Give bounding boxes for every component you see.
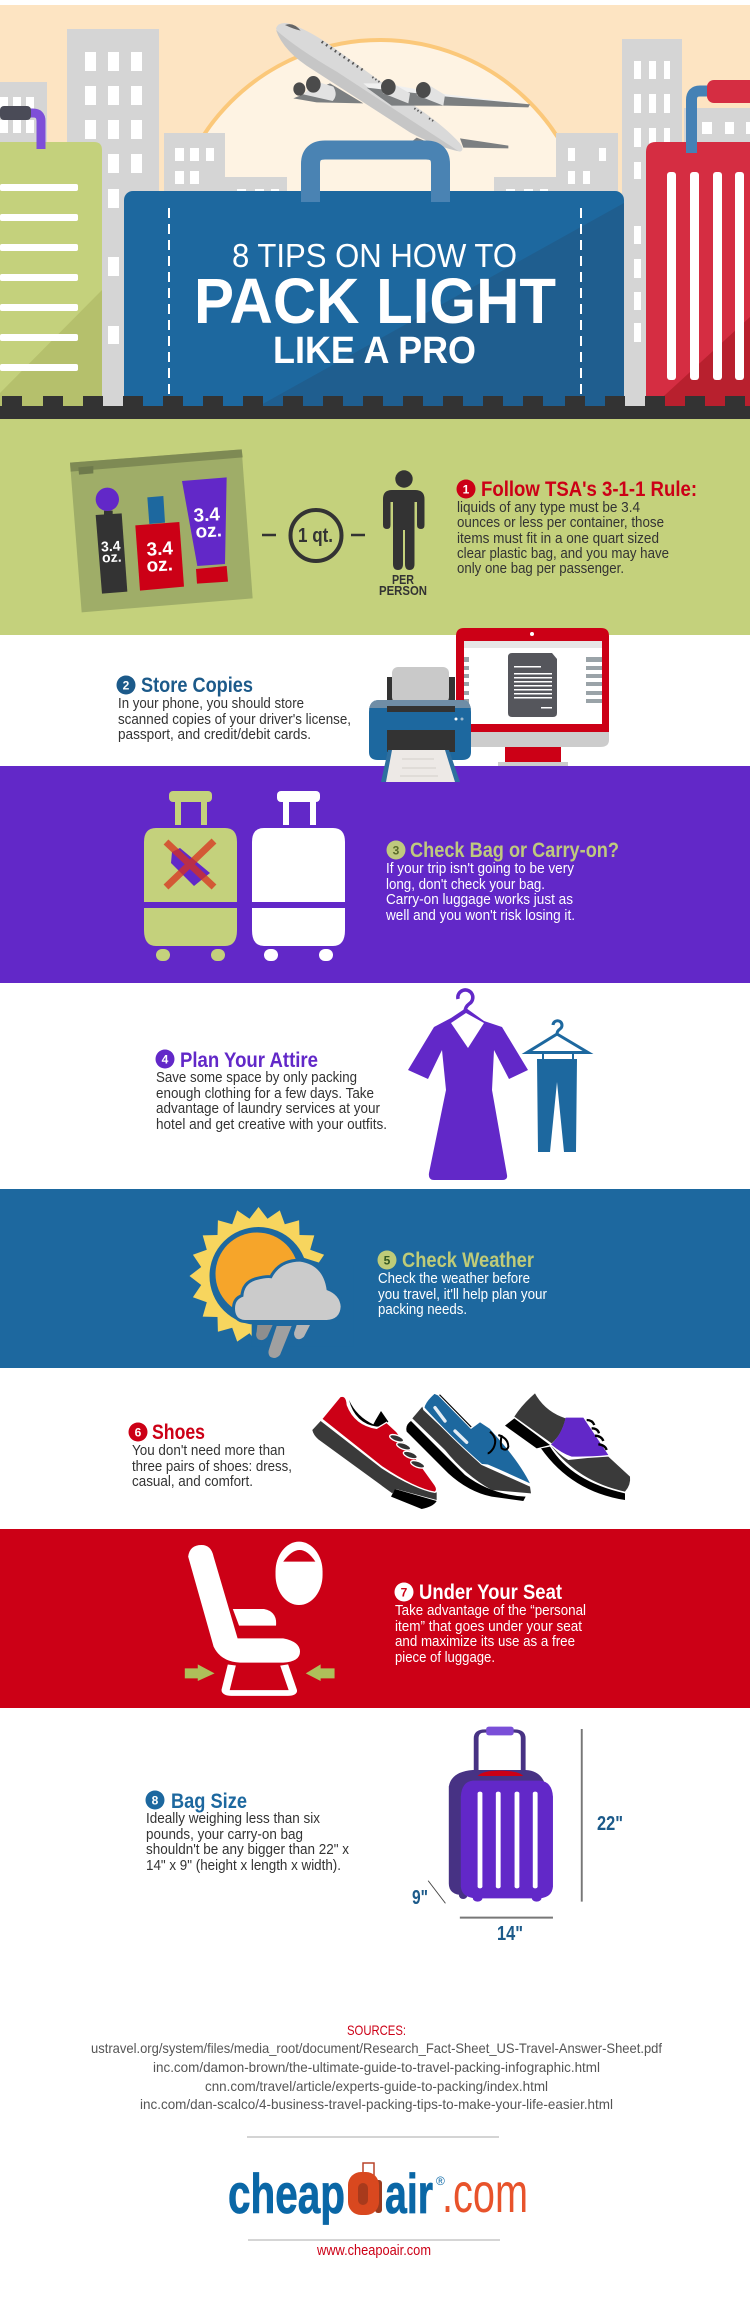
logo: cheapoair.com: .com [442,2161,528,2224]
text block: tip 2: scanned copies of your driver's license, [118,711,351,728]
heading: tip 1: 1 [463,482,470,496]
logo: cheapoair.com: ® [436,2174,445,2188]
text block: tip 5 [378,1270,547,1318]
text block: tip 6: casual, and comfort. [132,1473,253,1490]
sources list: inc.com/dan-scalco/4-business-travel-packing-tips-to-make-your-life-easier.html [140,2096,613,2112]
title [194,237,556,372]
heading: tip 4: 4 [162,1052,169,1066]
icon: sun and rain cloud [190,1207,353,1358]
text block: tip 7: piece of luggage. [395,1649,495,1666]
icon: plastic bag with bottles: oz. [195,520,222,543]
dimension labels [412,1813,623,1945]
icon: plastic bag with bottles: oz. [146,554,173,577]
text block: tip 1 [457,499,669,577]
city buildings [0,29,750,406]
ground band [0,396,750,419]
panel: tip 4 plan attire [156,990,588,1180]
panel: tip 1 TSA rule [0,419,750,635]
panel: tip 6 shoes [128,1393,630,1509]
per person label: PERSON [379,583,427,598]
title: LIKE A PRO [273,330,476,372]
heading: tip 7: Under Your Seat [419,1581,562,1604]
text block: tip 6: You don't need more than [132,1442,285,1459]
dimension labels: 22" [597,1813,623,1835]
text block: tip 1: clear plastic bag, and you may have [457,545,669,562]
sources list: cnn.com/travel/article/experts-guide-to-packing/index.html [205,2078,548,2094]
sun arc [169,40,591,462]
per person label [379,572,427,598]
text block: tip 8: 14" x 9" (height x length x width). [146,1857,341,1874]
sources heading: SOURCES: [347,2022,406,2038]
text block: tip 4: enough clothing for a few days. Take [156,1085,374,1102]
icon: airplane seat with arrows [185,1542,335,1693]
heading: tip 5: Check Weather [402,1249,534,1272]
text block: tip 2 [118,695,351,743]
text block: tip 8: pounds, your carry-on bag [146,1826,303,1843]
text block: tip 8: shouldn't be any bigger than 22" x [146,1841,349,1858]
website url: www.cheapoair.com [316,2242,431,2259]
text block: tip 6 [132,1442,292,1490]
icon: carry-on suitcase with dimensions [428,1727,582,1918]
heading: tip 6: 6 [135,1426,142,1440]
heading: tip 8: 8 [152,1794,159,1808]
text block: tip 1: liquids of any type must be 3.4 [457,499,640,516]
dimension labels: 14" [497,1923,523,1945]
logo: cheapoair.com [228,2161,528,2225]
green suitcase [0,106,102,406]
heading: tip 2: 2 [123,678,130,692]
dimension labels: 9" [412,1887,428,1909]
icon: one quart badge: 1 qt. [298,525,333,547]
icon: plastic bag with bottles: 3.4 [146,538,174,561]
heading: tip 6: Shoes [152,1421,205,1444]
icon: white suitcase [252,791,345,961]
icon: plastic bag with bottles: 3.4 [101,537,121,555]
panel: tip 8 bag size [146,1727,623,1945]
heading: tip 8 [146,1790,247,1813]
icon: printer [369,667,471,782]
icon: green suitcase crossed out [144,791,237,961]
icon: plastic bag with bottles: oz. [102,549,122,566]
heading: tip 6 [128,1421,205,1444]
text block: tip 8: Ideally weighing less than six [146,1810,320,1827]
icon: person [383,470,424,570]
sources list: ustravel.org/system/files/media_root/document/Research_Fact-Sheet_US-Travel-Answer-Sheet.pdf [91,2040,662,2056]
logo: cheapoair.com: air [385,2162,433,2225]
text block: tip 6: three pairs of shoes: dress, [132,1458,292,1475]
text block: tip 4: Save some space by only packing [156,1069,357,1086]
text block: tip 5: packing needs. [378,1301,467,1318]
text block: tip 8 [146,1810,349,1874]
text block: tip 2: passport, and credit/debit cards. [118,726,311,743]
icon: plastic bag with bottles: 3.4 [193,504,221,527]
icon: three shoes [312,1393,630,1509]
text block: tip 5: Check the weather before [378,1270,530,1287]
panel: header city scene [0,5,750,462]
text block: tip 1: items must fit in a one quart sized [457,530,659,547]
red suitcase [646,80,750,406]
logo: cheapoair.com: cheap [228,2162,345,2225]
sources list [91,2040,662,2112]
icon: one quart badge [262,510,365,561]
text block: tip 4: hotel and get creative with your outfits. [156,1116,387,1133]
text block: tip 2: In your phone, you should store [118,695,304,712]
panel: tip 5 check weather [0,1189,750,1368]
airplane [276,23,530,152]
text block: tip 1: ounces or less per container, those [457,514,664,531]
text block: tip 7 [395,1602,586,1666]
blue suitcase [124,150,624,406]
heading: tip 3: Check Bag or Carry-on? [410,839,619,862]
heading: tip 4: Plan Your Attire [180,1049,318,1072]
text block: tip 3: long, don't check your bag. [386,876,545,893]
heading: tip 2: Store Copies [141,674,253,697]
text block: tip 3 [385,860,575,924]
text block: tip 1: only one bag per passenger. [457,560,624,577]
title: 8 TIPS ON HOW TO [232,237,517,274]
title: PACK LIGHT [194,265,556,337]
icon: computer monitor [456,628,609,766]
text block: tip 3: Carry-on luggage works just as [386,891,573,908]
heading: tip 5: 5 [384,1254,391,1268]
text block: tip 4: advantage of laundry services at your [156,1100,380,1117]
sources list: inc.com/damon-brown/the-ultimate-guide-to-travel-packing-infographic.html [153,2059,600,2075]
text block: tip 3: If your trip isn't going to be very [386,860,574,877]
panel: tip 7 under your seat [0,1529,750,1708]
heading: tip 8: Bag Size [171,1790,247,1813]
text block: tip 3: well and you won't risk losing it. [385,907,575,924]
heading: tip 1: Follow TSA's 3-1-1 Rule: [481,478,697,501]
icon: dress on hanger [408,990,528,1180]
text block: tip 5: you travel, it'll help plan your [378,1286,547,1303]
text block: tip 7: item” that goes under your seat [395,1618,583,1635]
panel: tip 3 check bag [0,766,750,983]
text block: tip 7: Take advantage of the “personal [395,1602,586,1619]
text block: tip 4 [156,1069,387,1133]
text block: tip 7: and maximize its use as a free [395,1633,575,1650]
per person label: PER [392,572,414,587]
icon: trousers on hanger [527,1021,588,1152]
panel: tip 2 store copies [116,628,609,782]
heading: tip 7: 7 [401,1586,408,1600]
panel: sources [91,2022,662,2112]
heading: tip 3: 3 [393,844,400,858]
icon: plastic bag with bottles [70,449,253,612]
